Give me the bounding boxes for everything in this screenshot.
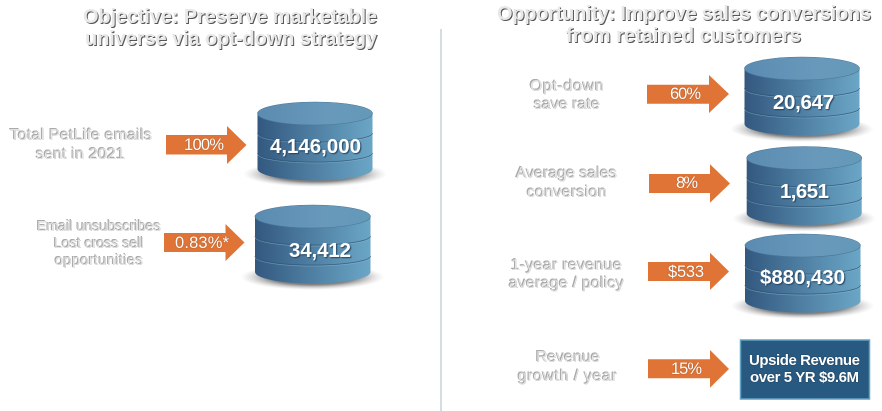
divider <box>440 29 442 411</box>
cylinder: 20,647: 20,647 <box>773 91 834 114</box>
arrow: 8% <box>649 164 730 203</box>
cylinder: 1,651: 1,651 <box>780 180 829 203</box>
label: email unsubscribes <box>37 219 161 269</box>
title: objective <box>83 6 378 50</box>
label: opt-down save rate: save rate <box>534 96 600 113</box>
arrow: $533 <box>648 253 729 290</box>
callout: upside revenue <box>740 340 870 399</box>
label: opt-down save rate <box>530 78 604 113</box>
label: average sales conversion <box>516 165 617 201</box>
label: average sales conversion: conversion <box>527 184 607 201</box>
label: revenue growth: Revenue <box>536 349 600 366</box>
cylinder: 20,647 <box>730 57 874 142</box>
label: 1-year revenue: 1-year revenue <box>511 257 622 274</box>
callout: upside revenue: over 5 YR $9.6M <box>750 369 859 386</box>
cylinder: 34,412 <box>240 205 384 290</box>
arrow: 8%: 8% <box>676 174 698 192</box>
label: revenue growth: growth / year <box>518 368 618 385</box>
label: total emails <box>10 127 152 163</box>
title: opportunity: from retained customers <box>566 25 801 47</box>
arrow: 0.83%* <box>164 224 244 261</box>
cylinder: $880,430: $880,430 <box>760 266 845 289</box>
arrow: 100% <box>166 126 246 164</box>
arrow: 60% <box>647 75 729 113</box>
title: opportunity: Opportunity: Improve sales conversions <box>497 3 871 25</box>
label: 1-year revenue <box>509 257 624 292</box>
label: email unsubscribes: Email unsubscribes <box>37 219 161 235</box>
cylinder: 4,146,000 <box>243 102 387 187</box>
arrow: 15%: 15% <box>671 360 702 378</box>
label: email unsubscribes: Lost cross sell <box>54 236 144 252</box>
title: opportunity <box>497 3 871 47</box>
title: objective: Objective: Preserve marketable <box>83 6 377 28</box>
cylinder: 34,412: 34,412 <box>289 239 351 262</box>
arrow: 100%: 100% <box>184 136 224 154</box>
label: 1-year revenue: average / policy <box>509 275 624 292</box>
cylinder: 1,651 <box>732 146 876 232</box>
cylinder: $880,430 <box>730 234 874 319</box>
callout: upside revenue: Upside Revenue <box>749 352 860 369</box>
arrow: 60%: 60% <box>670 85 701 103</box>
arrow: 15% <box>648 350 729 388</box>
label: total emails: sent in 2021 <box>36 146 125 163</box>
title: objective: universe via opt-down strategy <box>85 28 378 50</box>
label: opt-down save rate: Opt-down <box>530 78 604 95</box>
label: email unsubscribes: opportunities <box>55 253 143 269</box>
label: total emails: Total PetLife emails <box>10 127 152 144</box>
arrow: $533: $533 <box>668 263 704 281</box>
cylinder: 4,146,000: 4,146,000 <box>270 135 361 158</box>
arrow: 0.83%*: 0.83%* <box>175 234 230 252</box>
label: average sales conversion: Average sales <box>516 165 617 182</box>
label: revenue growth <box>518 349 618 385</box>
